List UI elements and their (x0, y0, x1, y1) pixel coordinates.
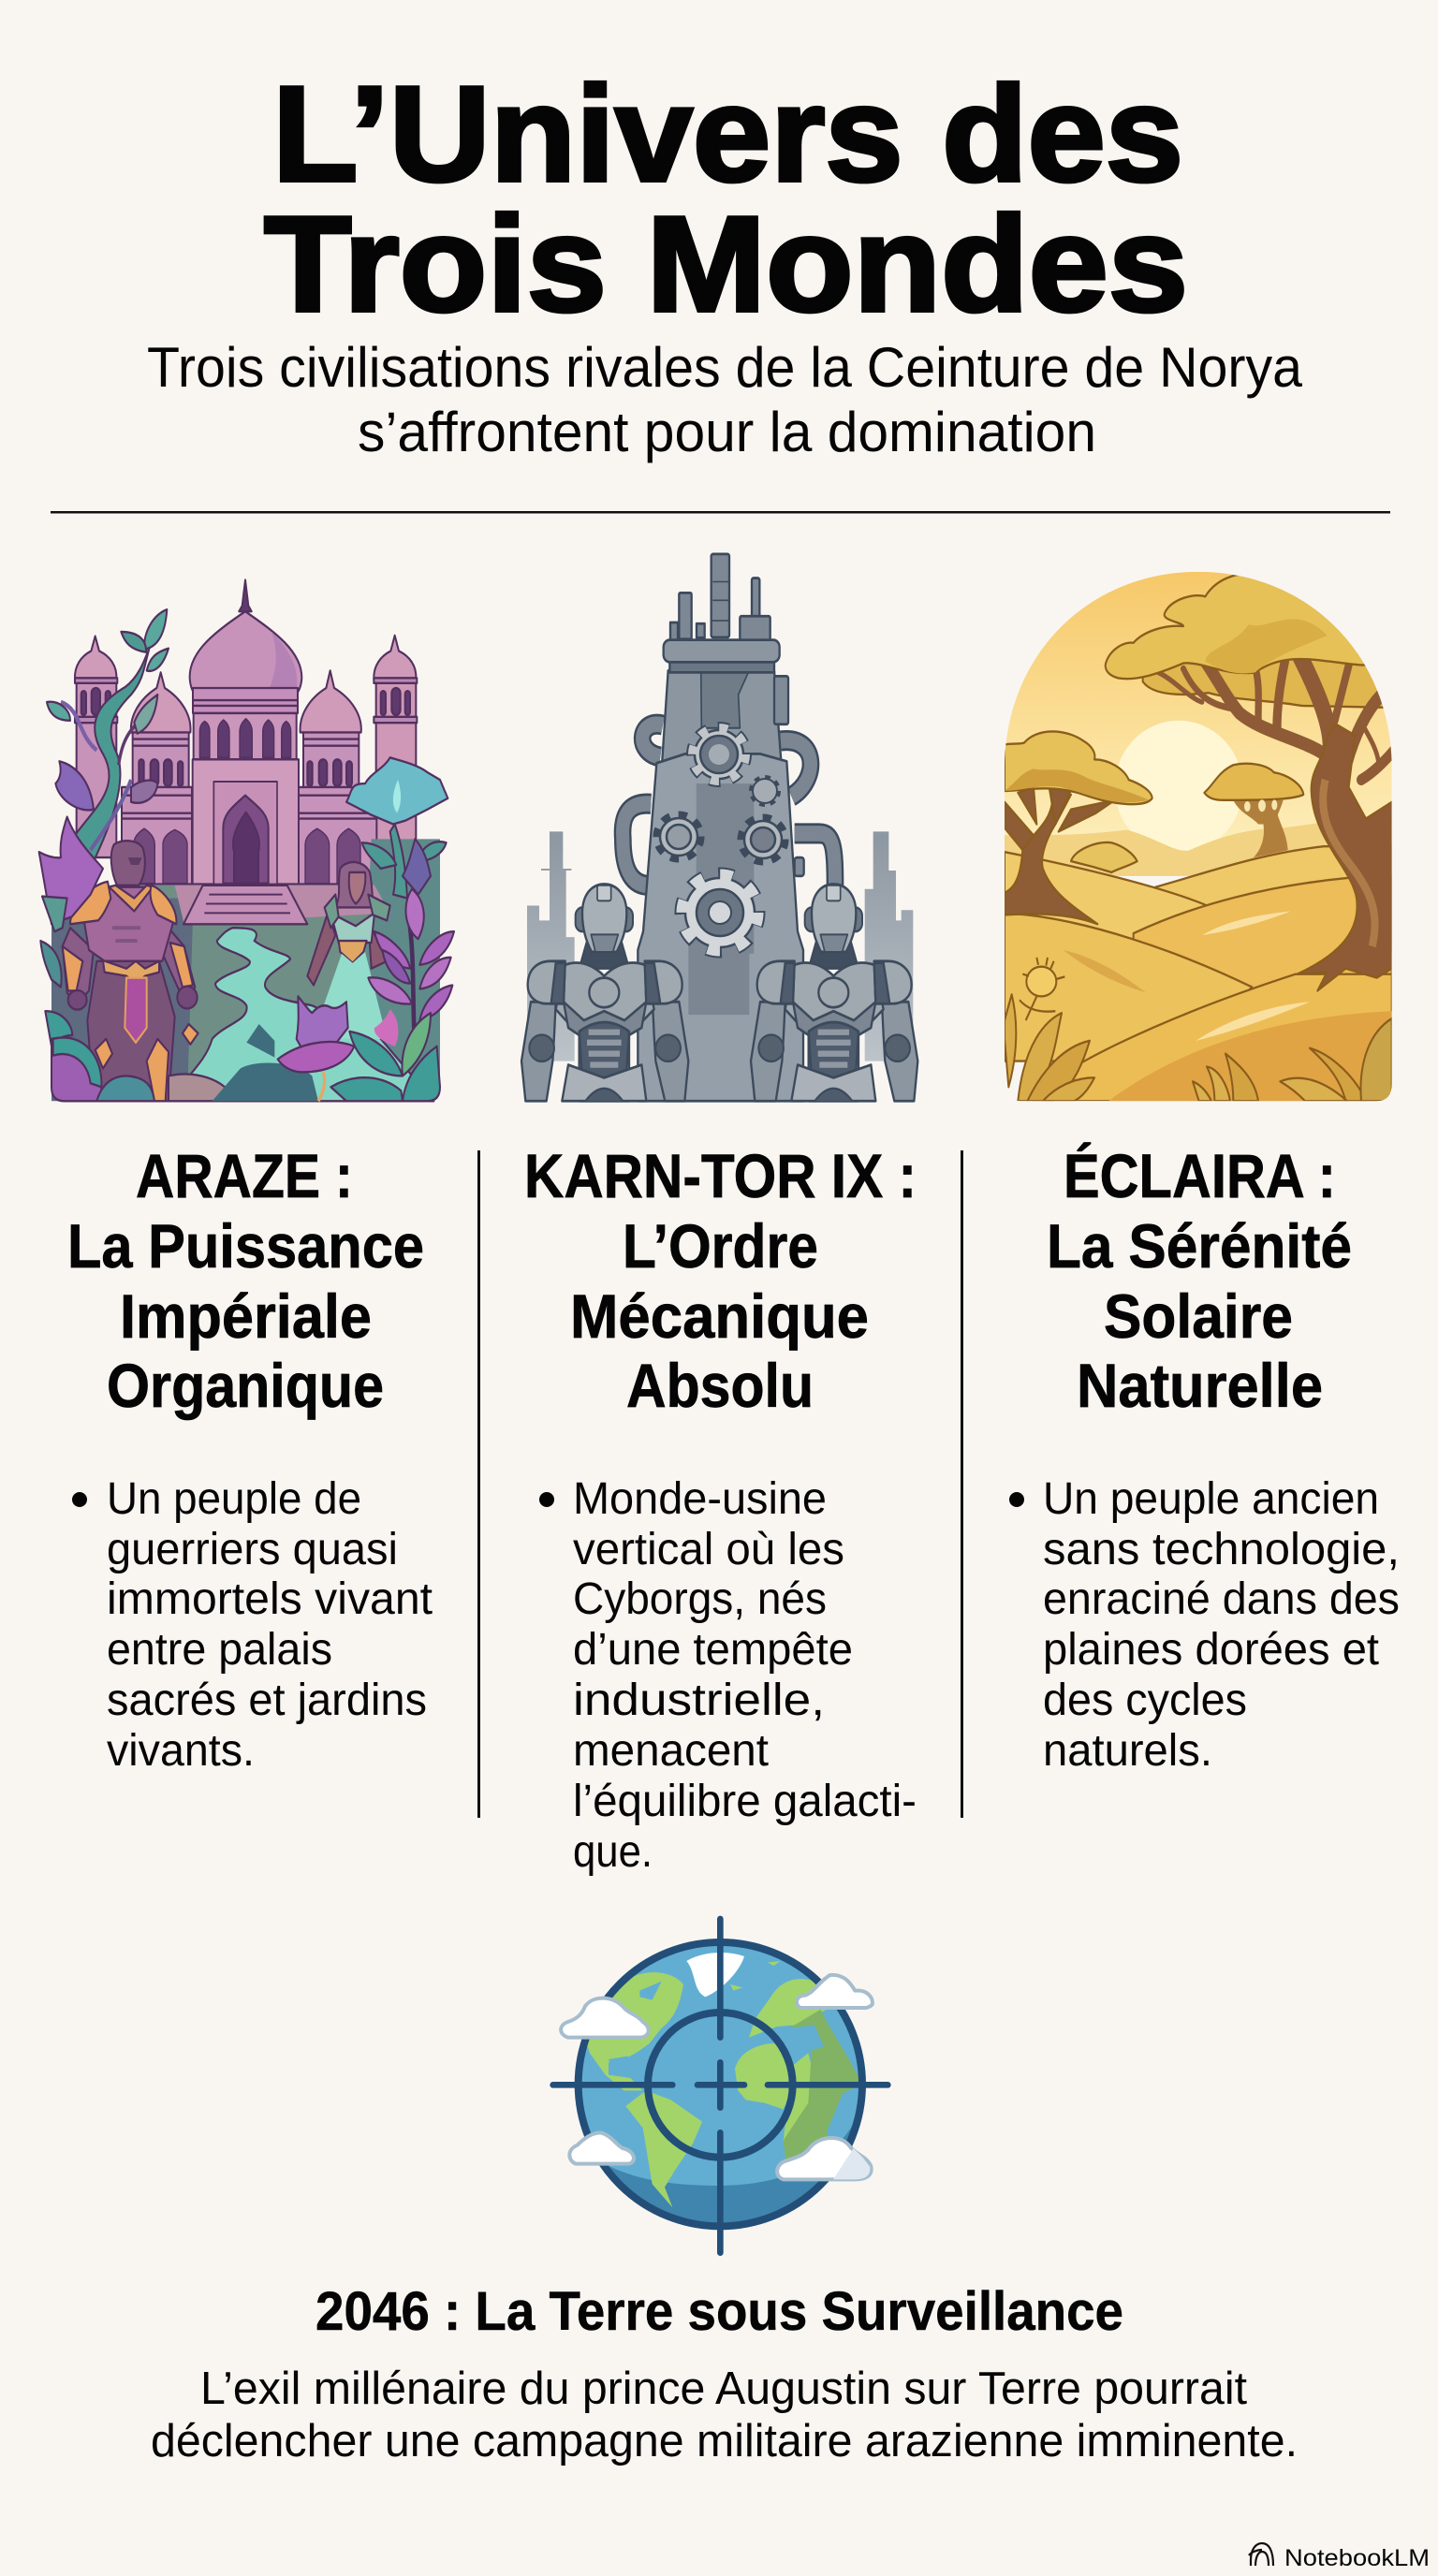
bullet text: Karn-Tor IX: vertical où les (573, 1525, 844, 1574)
right flower (346, 757, 448, 899)
gear left (658, 816, 699, 857)
gear small right (752, 778, 778, 804)
distant bush (1071, 842, 1137, 872)
sun (1115, 721, 1242, 854)
large right tree (1106, 572, 1394, 990)
heading: Araze (67, 1141, 424, 1420)
ground (51, 886, 440, 1101)
canopy (1105, 575, 1365, 680)
bullet text: Eclaira: plaines dorées et (1043, 1625, 1379, 1675)
bullet text: Araze: sacrés et jardins (107, 1676, 427, 1725)
title: Trois Mondes (264, 188, 1188, 340)
bullet text: Eclaira: sans technologie, (1043, 1525, 1400, 1574)
heading: Araze: Organique (107, 1351, 384, 1420)
rock (169, 1075, 236, 1101)
heading: Karn-Tor IX (524, 1141, 917, 1420)
heading: Eclaira: Solaire (1104, 1281, 1293, 1351)
subtitle: s’affrontent pour la domination (358, 401, 1096, 463)
bullet text: Araze: guerriers quasi (107, 1525, 398, 1574)
globe (578, 1942, 868, 2234)
branches (1158, 654, 1394, 787)
bullet text: Karn-Tor IX (539, 1474, 917, 1877)
pink mushroom plant (213, 1024, 354, 1101)
subtitle (147, 336, 1303, 463)
bullet text: Eclaira: enraciné dans des (1043, 1574, 1400, 1624)
north america (583, 1972, 683, 2090)
bullet text: Araze (72, 1474, 433, 1776)
bullet text: Karn-Tor IX: que. (573, 1827, 653, 1877)
heading: Eclaira: ÉCLAIRA : (1064, 1141, 1336, 1210)
background city silhouettes (527, 831, 913, 1061)
right purple leaves (368, 889, 454, 1046)
left tree (1005, 731, 1152, 924)
hills (1155, 846, 1392, 950)
purple spiky plant (297, 996, 348, 1050)
bullet text: Araze: immortels vivant (107, 1574, 433, 1624)
heading: Karn-Tor IX: KARN-TOR IX : (524, 1141, 917, 1210)
europe (749, 1961, 827, 2038)
main wings (122, 787, 376, 885)
central dome (190, 580, 301, 759)
heading: Karn-Tor IX: Absolu (626, 1351, 814, 1420)
warrior (63, 841, 198, 1101)
gears (658, 728, 784, 950)
heading: Eclaira (1047, 1141, 1352, 1420)
gear large (682, 875, 757, 950)
heading: Karn-Tor IX: Mécanique (570, 1281, 869, 1351)
bullet text: Eclaira: Un peuple ancien (1043, 1474, 1379, 1524)
river (169, 928, 433, 1101)
footer text: L’exil millénaire du prince Augustin sur Terre pourrait (200, 2364, 1247, 2414)
heading: Karn-Tor IX: L’Ordre (623, 1211, 818, 1281)
bullet text: Eclaira: des cycles (1043, 1676, 1247, 1725)
column: Karn-Tor IX (524, 1141, 917, 1877)
underside foliage (1143, 654, 1392, 708)
bullet text: Eclaira (1009, 1474, 1400, 1776)
robots (521, 885, 688, 1101)
pipes (623, 724, 835, 886)
footer heading: 2046 : La Terre sous Surveillance (315, 2281, 1123, 2342)
heading: Araze: La Puissance (67, 1211, 424, 1281)
heading: Araze: ARAZE : (136, 1141, 353, 1210)
bullet text: Araze: Un peuple de (107, 1474, 361, 1524)
bullet text: Karn-Tor IX: industrielle, (573, 1676, 825, 1725)
sky (1005, 572, 1392, 868)
illustration: Karn-Tor IX tower and cyborgs (521, 554, 917, 1101)
bullet text: Karn-Tor IX: d’une tempête (573, 1625, 853, 1675)
bullet text: Araze: vivants. (107, 1726, 255, 1776)
illustration: Eclaira golden plains (1005, 572, 1394, 1101)
bullet text: Karn-Tor IX: l’équilibre galacti- (573, 1777, 917, 1826)
bullet text: Karn-Tor IX: Cyborgs, nés (573, 1574, 827, 1624)
heading: Eclaira: La Sérénité (1047, 1211, 1352, 1281)
clouds (561, 1975, 873, 2179)
south america (625, 2090, 702, 2207)
orange bud (183, 1024, 198, 1045)
stairs (183, 886, 307, 924)
column: Eclaira (1009, 1141, 1400, 1776)
title (264, 58, 1188, 340)
crosshair (553, 1919, 888, 2253)
trunk (1298, 724, 1392, 990)
icon: NotebookLM (1249, 2543, 1273, 2566)
chimneys (670, 554, 770, 643)
woman (307, 862, 390, 1039)
heading: Araze: Impériale (120, 1281, 372, 1351)
right tower (374, 636, 417, 857)
tower body (638, 640, 804, 1101)
left vine with leaves (47, 609, 169, 861)
bullet text: Karn-Tor IX: Monde-usine (573, 1474, 827, 1524)
NotebookLM logo: NotebookLM (1284, 2545, 1430, 2571)
gear right (742, 819, 784, 860)
subtitle: Trois civilisations rivales de la Ceinture de Norya (147, 336, 1303, 399)
column: Araze (67, 1141, 433, 1776)
gear upper (693, 728, 745, 781)
footer text (151, 2364, 1298, 2466)
far dunes (1005, 816, 1367, 876)
bullet text: Eclaira: naturels. (1043, 1726, 1212, 1776)
illustration: Araze palace and warriors (39, 580, 454, 1101)
small distant tree (1204, 764, 1303, 857)
footer text: déclencher une campagne militaire arazienne imminente. (151, 2416, 1298, 2466)
bullet text: Karn-Tor IX: menacent (573, 1726, 769, 1776)
left tower (75, 637, 117, 857)
column separators (477, 1150, 963, 1818)
left purple foliage (39, 817, 154, 1101)
NotebookLM logo (1249, 2543, 1430, 2571)
icon: Earth in crosshairs (553, 1919, 888, 2253)
side domes (131, 670, 361, 791)
right bottom leaves (330, 1013, 440, 1101)
title: L’Univers des (272, 58, 1183, 210)
africa (735, 2043, 793, 2109)
bullet text: Araze: entre palais (107, 1625, 332, 1675)
flower and grasses (1005, 958, 1392, 1101)
portal (193, 759, 299, 885)
heading: Eclaira: Naturelle (1077, 1351, 1323, 1420)
